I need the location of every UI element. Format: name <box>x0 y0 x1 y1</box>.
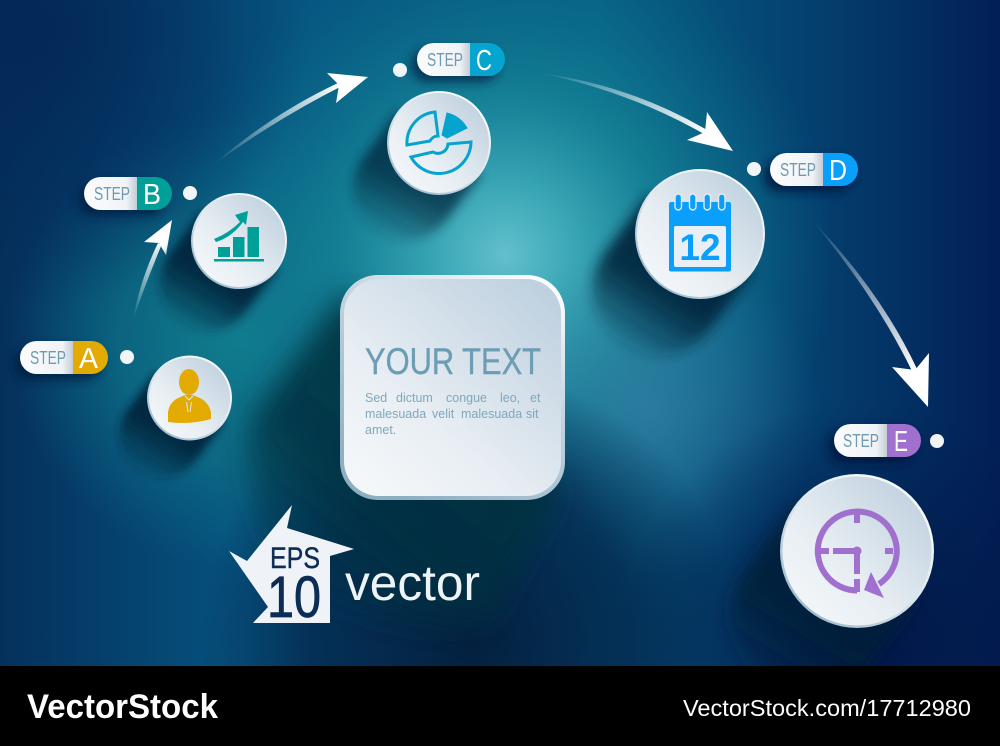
footer bar <box>0 666 1000 746</box>
panel shadow <box>247 290 560 626</box>
body text: malesuada <box>365 407 426 421</box>
pill: step B: STEP <box>94 184 130 204</box>
icon: clock <box>818 512 897 598</box>
pill: step B <box>78 177 172 216</box>
disc: person <box>147 356 232 440</box>
pill: step C <box>411 43 505 82</box>
center panel <box>340 275 565 500</box>
disc shadow <box>729 505 919 696</box>
body text: congue <box>446 391 487 405</box>
disc: pie <box>387 91 491 195</box>
arrow: step C to D <box>540 73 733 151</box>
disc: calendar <box>635 169 765 299</box>
body text: leo, <box>500 391 520 405</box>
body text: sit <box>526 407 539 421</box>
pill: step C: STEP <box>427 50 463 70</box>
footer logo: VectorStock <box>27 688 218 726</box>
step B group <box>78 177 287 331</box>
step A group <box>14 341 232 478</box>
pill: step D: STEP <box>780 160 816 180</box>
step E group <box>729 424 944 696</box>
icon: bar chart <box>214 211 264 262</box>
disc shadow <box>119 372 224 478</box>
body text <box>365 391 541 437</box>
pill: step C: C <box>476 45 492 77</box>
pill: step E: STEP <box>843 431 879 451</box>
pill: step E <box>828 424 921 463</box>
dot: step C <box>393 63 407 77</box>
dot: step B <box>183 186 197 200</box>
body text: velit <box>432 407 455 421</box>
pill: step B: B <box>143 179 161 211</box>
heading: YOUR TEXT <box>365 341 541 382</box>
disc shadow <box>159 212 277 331</box>
EPS 10 badge: EPS <box>270 542 320 575</box>
disc shadow <box>592 195 752 356</box>
step C group <box>353 43 505 241</box>
pill: step D: D <box>829 155 847 187</box>
pill: step D <box>764 153 858 192</box>
icon: pie chart <box>407 112 471 174</box>
icon: person <box>168 369 211 423</box>
EPS 10 badge <box>229 505 354 630</box>
body text: malesuada <box>461 407 522 421</box>
icon: calendar <box>669 194 731 272</box>
body text: dictum <box>396 391 433 405</box>
disc: chart <box>191 193 287 289</box>
dot: step D <box>747 162 761 176</box>
vector label: vector <box>345 555 480 611</box>
pill: step A <box>14 341 108 380</box>
body text: amet. <box>365 423 396 437</box>
arrow: step B to C <box>213 73 368 165</box>
footer url: VectorStock.com/17712980 <box>683 695 971 721</box>
pill: step A: A <box>79 343 99 375</box>
body text: Sed <box>365 391 387 405</box>
icon: calendar: 12 <box>679 227 721 268</box>
disc shadow <box>353 112 481 241</box>
step D group <box>592 153 858 356</box>
EPS 10 badge: 10 <box>267 565 321 630</box>
pill: step E: E <box>894 426 908 458</box>
pill: step A: STEP <box>30 348 66 368</box>
dot: step E <box>930 434 944 448</box>
body text: et <box>530 391 541 405</box>
dot: step A <box>120 350 134 364</box>
arrow: step A to B <box>133 220 172 320</box>
disc: clock <box>780 474 934 628</box>
arrow: step D to E <box>810 218 929 407</box>
